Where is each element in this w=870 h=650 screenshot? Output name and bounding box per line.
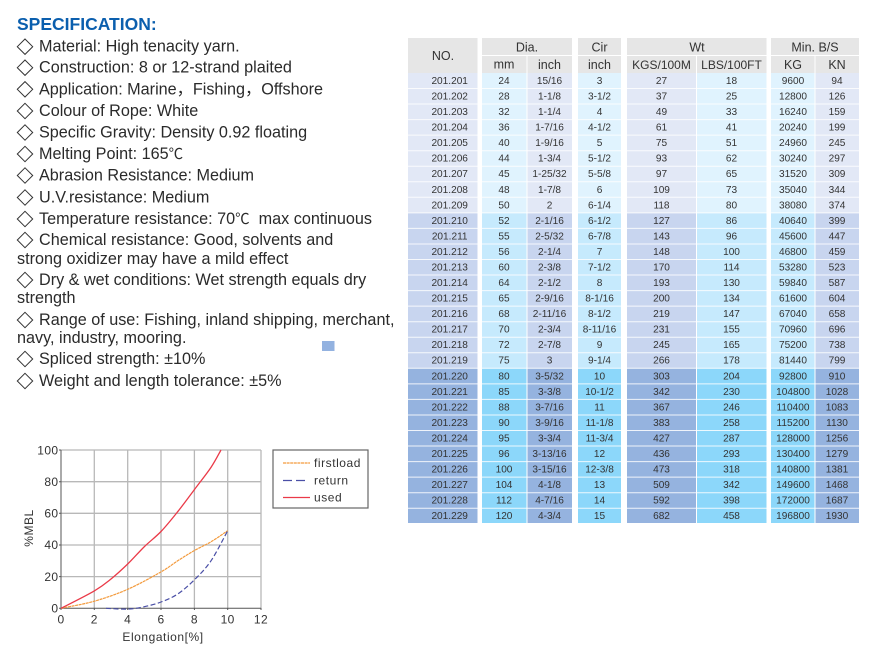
spec: chemical resistance — [17, 231, 333, 268]
x axis labels: 8 — [191, 612, 198, 626]
table rows: 266 — [653, 356, 670, 367]
y axis title: %MBL — [22, 509, 36, 547]
table rows: 104 — [496, 480, 513, 491]
table rows: 127 — [653, 216, 670, 227]
table rows: 149600 — [776, 480, 810, 491]
y axis labels: 60 — [44, 506, 58, 520]
spec: chemical resistance: Chemical resistance: Good, solvents and — [39, 231, 333, 249]
specification list — [17, 38, 394, 390]
table rows: 1-7/16 — [535, 123, 564, 134]
table rows: 118 — [653, 200, 670, 211]
table rows: 219 — [653, 309, 670, 320]
spec: material: Material: High tenacity yarn. — [39, 38, 240, 56]
table rows: 604 — [829, 294, 846, 305]
table rows: 201.205 — [431, 138, 468, 149]
table rows: 201.222 — [431, 402, 468, 413]
table rows: 523 — [829, 262, 846, 274]
table rows: 374 — [829, 200, 846, 211]
table rows: 5-1/2 — [588, 154, 611, 165]
table rows: 1279 — [826, 449, 849, 460]
spec: range of use: Range of use: Fishing, inland shipping, merchant, — [39, 311, 394, 329]
table rows: 110400 — [777, 402, 810, 413]
table rows: 1028 — [826, 387, 849, 398]
table rows: 399 — [829, 216, 846, 227]
table rows: 7 — [597, 247, 603, 258]
table rows: 51 — [726, 138, 737, 149]
table rows: 143 — [653, 231, 670, 242]
table rows: 5-5/8 — [588, 169, 611, 180]
table rows: 193 — [653, 278, 670, 289]
table rows: 134 — [723, 294, 740, 305]
table rows: 148 — [653, 247, 670, 258]
y axis labels: 20 — [44, 570, 58, 584]
table rows: 2-1/2 — [538, 278, 561, 289]
table rows: 201.215 — [431, 294, 468, 305]
table rows: 398 — [723, 496, 740, 507]
title: SPECIFICATION: — [17, 14, 157, 34]
table rows: 6-1/2 — [588, 216, 611, 227]
spec: dry and wet conditions: Dry & wet conditions: Wet strength equals dry — [39, 271, 367, 289]
table rows: 1-1/4 — [538, 107, 561, 118]
table rows: 427 — [653, 433, 670, 444]
table rows — [431, 76, 849, 522]
table rows: 59840 — [779, 278, 807, 289]
table rows: 24 — [498, 76, 510, 87]
table rows: 658 — [829, 309, 846, 320]
table rows: 11-3/4 — [586, 433, 614, 444]
curve: return — [106, 531, 228, 609]
table rows: 245 — [653, 340, 670, 351]
table rows: 100 — [723, 247, 740, 258]
table rows: 2 — [547, 200, 553, 211]
table rows: 200 — [653, 294, 670, 305]
table rows: 68 — [498, 309, 510, 320]
table rows: 81440 — [779, 356, 807, 367]
table rows: 3-3/4 — [538, 433, 561, 444]
table rows: 96 — [498, 449, 510, 460]
y axis labels — [37, 444, 58, 616]
curve: used — [61, 450, 221, 608]
table rows: 126 — [829, 92, 846, 102]
table rows: 201.220 — [431, 371, 468, 382]
table rows: 31520 — [779, 169, 807, 180]
spec: dry and wet conditions — [17, 271, 367, 307]
table rows: 2-1/16 — [535, 216, 564, 227]
table rows: 9600 — [782, 76, 805, 87]
specification table — [405, 38, 862, 523]
axes — [59, 450, 261, 610]
x axis labels — [57, 612, 268, 626]
table rows: 367 — [653, 402, 670, 413]
table rows: 230 — [723, 387, 740, 398]
table rows: 799 — [829, 356, 846, 367]
table rows: 318 — [723, 464, 740, 476]
table rows: 1468 — [826, 480, 849, 491]
table rows: 24960 — [779, 138, 807, 149]
x axis labels: 12 — [254, 612, 268, 626]
table rows: 147 — [723, 309, 740, 320]
legend: used — [314, 491, 342, 505]
table header: Min. B/S — [791, 41, 839, 55]
table rows: 165 — [723, 340, 740, 351]
table rows: 65 — [498, 294, 510, 305]
table rows: 14 — [594, 496, 605, 507]
table rows: 1930 — [826, 511, 849, 522]
x axis labels: 6 — [157, 612, 165, 626]
table cell colour bands — [405, 73, 862, 523]
table rows: 342 — [653, 387, 670, 398]
spec: application: Application: Marine，Fishing，Offshore — [39, 80, 323, 98]
table rows: 5 — [597, 138, 603, 149]
table rows: 204 — [723, 371, 740, 382]
table rows: 1-1/8 — [538, 92, 561, 102]
table rows: 201.216 — [431, 309, 468, 320]
table rows: 73 — [726, 185, 737, 196]
x axis title: Elongation[%] — [122, 630, 204, 644]
table rows: 25 — [726, 92, 737, 102]
table rows: 97 — [656, 169, 667, 180]
table rows: 92800 — [779, 371, 807, 382]
table rows: 696 — [829, 325, 846, 336]
table rows: 15/16 — [537, 76, 563, 87]
table rows: 88 — [498, 402, 510, 413]
table rows: 196800 — [776, 511, 810, 522]
table rows: 60 — [498, 262, 510, 274]
table rows: 8-1/2 — [588, 309, 611, 320]
table rows: 27 — [656, 76, 667, 87]
table rows: 509 — [653, 480, 670, 491]
table rows: 7-1/2 — [588, 262, 611, 274]
table rows: 201.217 — [431, 325, 468, 336]
table rows: 3-3/8 — [538, 387, 561, 398]
table rows: 9 — [597, 340, 603, 351]
table header: Wt — [689, 41, 705, 55]
table rows: 201.203 — [431, 107, 468, 118]
table rows: 52 — [498, 216, 510, 227]
legend — [273, 450, 368, 508]
legend: firstload — [314, 456, 361, 470]
x axis labels: 4 — [124, 612, 131, 626]
table rows: 738 — [829, 340, 846, 351]
table rows: 4-1/8 — [538, 480, 561, 491]
table rows: 201.227 — [431, 480, 468, 491]
table rows: 6-1/4 — [588, 200, 611, 211]
table rows: 62 — [726, 154, 737, 165]
table rows: 55 — [498, 231, 510, 242]
spec: spliced strength: Spliced strength: ±10% — [39, 350, 205, 368]
table rows: 140800 — [776, 464, 810, 476]
table rows: 32 — [498, 107, 510, 118]
table rows: 201.208 — [431, 185, 468, 196]
table rows: 40640 — [779, 216, 807, 227]
table header: NO. — [432, 49, 454, 63]
table rows: 1-25/32 — [532, 169, 567, 180]
table rows: 287 — [723, 433, 740, 444]
table rows: 473 — [653, 464, 670, 476]
table header: KN — [828, 58, 846, 72]
table rows: 1083 — [826, 402, 849, 413]
table rows: 201.207 — [431, 169, 468, 180]
table rows: 1-7/8 — [538, 185, 561, 196]
table rows: 3-1/2 — [588, 92, 611, 102]
table rows: 11-1/8 — [586, 418, 614, 429]
y axis labels: 0 — [51, 602, 58, 616]
spec: construction: Construction: 8 or 12-strand plaited — [39, 59, 292, 77]
table rows: 344 — [829, 185, 846, 196]
table header: KGS/100M — [632, 58, 691, 72]
table rows: 201.213 — [431, 262, 468, 274]
table rows: 130 — [723, 278, 740, 289]
table rows: 40 — [498, 138, 510, 149]
table rows: 201.221 — [431, 387, 468, 398]
table rows: 13 — [594, 480, 605, 491]
table rows: 3-5/32 — [535, 371, 564, 382]
table rows: 309 — [829, 169, 846, 180]
table rows: 231 — [653, 325, 670, 336]
table rows: 12 — [594, 449, 605, 460]
table rows: 201.229 — [431, 511, 468, 522]
table rows: 1381 — [826, 464, 849, 476]
table rows: 2-9/16 — [535, 294, 564, 305]
x axis labels: 2 — [91, 612, 98, 626]
table rows: 8-1/16 — [585, 294, 614, 305]
table rows: 16240 — [779, 107, 807, 118]
table rows: 10-1/2 — [585, 387, 614, 398]
table rows: 38080 — [779, 200, 807, 211]
table rows: 11 — [594, 402, 605, 413]
table header: inch — [538, 58, 561, 72]
spec: melting point: Melting Point: 165℃ — [39, 145, 183, 163]
table rows: 199 — [829, 123, 846, 134]
table rows: 1-3/4 — [538, 154, 561, 165]
table rows: 2-11/16 — [533, 309, 567, 320]
table rows: 115200 — [777, 418, 810, 429]
table rows: 37 — [656, 92, 667, 102]
table rows: 3-9/16 — [535, 418, 564, 429]
curve: firstload — [61, 531, 228, 608]
table rows: 114 — [723, 262, 740, 274]
table rows: 46800 — [779, 247, 807, 258]
table rows: 2-7/8 — [538, 340, 561, 351]
table rows: 70960 — [779, 325, 807, 336]
table rows: 159 — [829, 107, 846, 118]
table rows: 4-3/4 — [538, 511, 561, 522]
y axis labels: 40 — [44, 538, 58, 552]
table rows: 56 — [498, 247, 510, 258]
table rows: 303 — [653, 371, 670, 382]
table rows: 8-11/16 — [583, 325, 617, 336]
table rows: 8 — [597, 278, 603, 289]
table rows: 44 — [498, 154, 510, 165]
table rows: 201.225 — [431, 449, 468, 460]
spec: abrasion resistance: Abrasion Resistance: Medium — [39, 166, 254, 184]
table rows: 201.228 — [431, 496, 468, 507]
table rows: 109 — [653, 185, 670, 196]
table rows: 100 — [496, 464, 513, 476]
table rows: 30240 — [779, 154, 807, 165]
table rows: 201.210 — [431, 216, 468, 227]
table rows: 447 — [829, 231, 846, 242]
table rows: 3 — [597, 76, 603, 87]
table rows: 90 — [498, 418, 510, 429]
table rows: 155 — [723, 325, 740, 336]
table rows: 95 — [498, 433, 510, 444]
table rows: 293 — [723, 449, 740, 460]
table rows: 61 — [656, 123, 667, 134]
table rows: 3-7/16 — [535, 402, 564, 413]
table rows: 112 — [496, 496, 512, 507]
table rows: 20240 — [779, 123, 807, 134]
table rows: 3-15/16 — [532, 464, 567, 476]
table rows: 41 — [726, 123, 737, 134]
table rows: 1130 — [826, 418, 848, 429]
table rows: 130400 — [776, 449, 810, 460]
table rows: 910 — [829, 371, 846, 382]
grid lines — [61, 450, 261, 608]
table header: mm — [494, 58, 514, 72]
table rows: 72 — [498, 340, 510, 351]
spec: temperature resistance: Temperature resistance: 70℃ max continuous — [39, 210, 372, 228]
table rows: 587 — [829, 278, 846, 289]
table header: KG — [784, 58, 802, 72]
table rows: 12-3/8 — [585, 464, 614, 476]
table rows: 45 — [498, 169, 510, 180]
table rows: 458 — [723, 511, 740, 522]
table rows: 49 — [656, 107, 667, 118]
table rows: 80 — [726, 200, 737, 211]
table rows: 85 — [498, 387, 510, 398]
table rows: 2-3/8 — [538, 262, 561, 274]
table rows: 67040 — [779, 309, 807, 320]
table rows: 36 — [498, 123, 510, 134]
table rows: 4 — [597, 107, 603, 118]
y axis labels: 100 — [37, 444, 58, 458]
table rows: 50 — [498, 200, 510, 211]
table rows: 201.202 — [431, 92, 468, 102]
table rows: 33 — [726, 107, 737, 118]
table rows: 246 — [723, 402, 740, 413]
table rows: 45600 — [779, 231, 807, 242]
table rows: 201.226 — [431, 464, 468, 476]
spec: weight and length tolerance: Weight and length tolerance: ±5% — [39, 372, 282, 390]
table rows: 75200 — [779, 340, 807, 351]
table header: Cir — [592, 41, 607, 55]
x axis labels: 0 — [57, 612, 65, 626]
table rows: 80 — [498, 371, 510, 382]
table rows: 70 — [498, 325, 510, 336]
x axis labels: 10 — [221, 612, 235, 626]
table rows: 1-9/16 — [535, 138, 564, 149]
table rows: 120 — [496, 511, 513, 522]
table rows: 201.219 — [431, 356, 468, 367]
table rows: 1256 — [826, 433, 849, 444]
table header: inch — [588, 58, 611, 72]
table rows: 4-1/2 — [588, 123, 611, 134]
table rows: 170 — [653, 262, 670, 274]
table rows: 201.212 — [431, 247, 468, 258]
table rows: 201.201 — [431, 76, 468, 87]
spec: UV resistance: U.V.resistance: Medium — [39, 188, 209, 206]
elongation chart — [22, 444, 368, 644]
table header: LBS/100FT — [701, 58, 763, 72]
spec: range of use — [17, 311, 394, 347]
table rows: 201.224 — [431, 433, 468, 444]
table rows: 201.206 — [431, 154, 468, 165]
table rows: 2-1/4 — [538, 247, 561, 258]
table rows: 201.223 — [431, 418, 468, 429]
table rows: 201.214 — [431, 278, 468, 289]
table rows: 86 — [726, 216, 737, 227]
table header: Dia. — [516, 41, 538, 55]
table rows: 178 — [723, 356, 740, 367]
spec: chemical resistance: strong oxidizer may have a mild effect — [17, 250, 289, 268]
table rows: 75 — [498, 356, 510, 367]
table rows: 383 — [653, 418, 670, 429]
table rows: 96 — [726, 231, 737, 242]
spec: colour: Colour of Rope: White — [39, 102, 198, 120]
table rows: 64 — [498, 278, 510, 289]
table rows: 104800 — [776, 387, 810, 398]
table rows: 201.204 — [431, 123, 468, 134]
table header — [408, 38, 859, 73]
table rows: 201.218 — [431, 340, 468, 351]
table rows: 28 — [498, 92, 510, 102]
table rows: 12800 — [779, 92, 807, 102]
spec: range of use: navy, industry, mooring. — [17, 329, 186, 347]
table rows: 245 — [829, 138, 846, 149]
table rows: 436 — [653, 449, 670, 460]
table rows: 682 — [653, 511, 670, 522]
table rows: 128000 — [776, 433, 810, 444]
table rows: 53280 — [779, 262, 807, 274]
table rows: 75 — [656, 138, 667, 149]
table rows: 3 — [547, 356, 553, 367]
table rows: 61600 — [779, 294, 807, 305]
table rows: 10 — [594, 371, 605, 382]
table rows: 172000 — [776, 496, 810, 507]
table rows: 2-5/32 — [535, 231, 564, 242]
table rows: 9-1/4 — [588, 356, 611, 367]
table rows: 4-7/16 — [535, 496, 564, 507]
table rows: 592 — [653, 496, 670, 507]
table rows: 94 — [831, 76, 843, 87]
table rows: 15 — [594, 511, 605, 522]
table rows: 6-7/8 — [588, 231, 611, 242]
table rows: 65 — [726, 169, 737, 180]
table rows: 258 — [723, 418, 740, 429]
spec: specific gravity: Specific Gravity: Density 0.92 floating — [39, 124, 307, 142]
table rows: 459 — [829, 247, 846, 258]
small blue square — [322, 341, 334, 351]
legend: return — [314, 474, 349, 488]
table rows: 6 — [597, 185, 603, 196]
spec: dry and wet conditions: strength — [17, 289, 76, 307]
table rows: 35040 — [779, 185, 807, 196]
y axis labels: 80 — [44, 475, 58, 489]
table rows: 1687 — [826, 496, 849, 507]
table rows: 297 — [829, 154, 846, 165]
table rows: 48 — [498, 185, 510, 196]
table rows: 3-13/16 — [532, 449, 567, 460]
table rows: 18 — [726, 76, 737, 87]
table rows: 93 — [656, 154, 667, 165]
table rows: 201.211 — [432, 231, 468, 242]
table rows: 2-3/4 — [538, 325, 561, 336]
table rows: 201.209 — [431, 200, 468, 211]
table rows: 342 — [723, 480, 740, 491]
